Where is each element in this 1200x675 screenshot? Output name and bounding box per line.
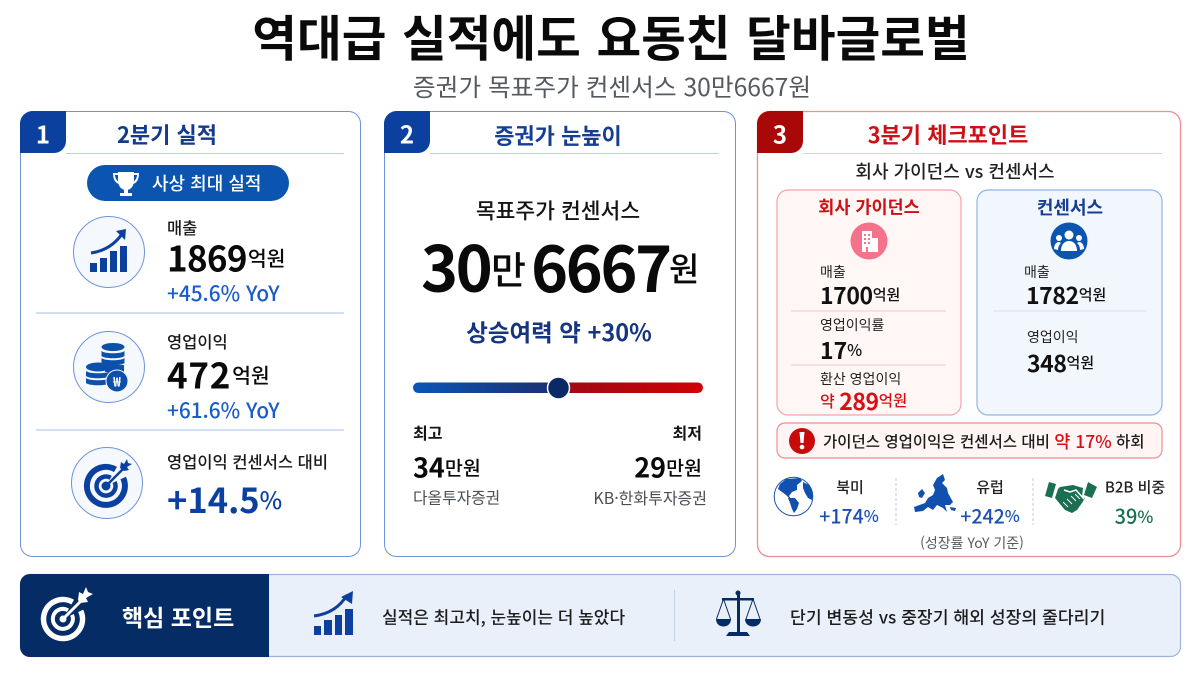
big number: 30만6667원: 원 [669,243,699,291]
badge: 사상 최대 실적: 사상 최대 실적 [152,170,261,196]
card: 회사 가이던스: 17% [820,332,862,366]
subheading: 회사 가이던스 vs 컨센서스 [855,158,1055,184]
panel: 3분기 체크포인트 [757,111,1180,556]
heading: 2분기 실적: 2분기 실적 [117,118,217,150]
low target: 최저 [673,420,702,444]
title: 역대급 실적에도 요동친 달바글로벌 [252,0,970,70]
heading: 증권가 눈높이: 증권가 눈높이 [494,119,622,151]
card: 컨센서스 [977,190,1162,415]
note: (성장률 YoY 기준) [920,533,1024,553]
icon: target [44,587,93,639]
panel: 증권가 눈높이 [384,111,736,556]
metric: 영업이익 컨센서스 대비 [72,448,328,523]
icon: people [1050,222,1088,260]
badge: 사상 최대 실적 [87,165,289,201]
label: 목표주가 컨센서스: 목표주가 컨센서스 [476,194,640,226]
metric: 매출 [74,215,286,307]
low target: 29만원 [634,446,702,486]
high target: 34만원 [413,446,481,486]
high target [413,420,500,508]
badge: 1: 1 [36,116,50,150]
high target: 최고 [413,420,443,444]
icon: alert [789,428,815,454]
card: 회사 가이던스: 회사 가이던스 [818,194,920,220]
icon: coins: ₩ [112,372,121,390]
icon: europe map [914,474,956,512]
big number: 30만6667원: 6667 [531,220,670,310]
icon: trophy [113,172,139,196]
point 1: 실적은 최고치, 눈높이는 더 높았다 [382,604,625,628]
stat: 북미: 북미 [836,476,864,498]
icon: building [850,222,888,260]
icon: scales [716,590,761,636]
panel: 핵심 포인트 [20,574,1180,657]
high target: 다올투자증권 [413,486,500,508]
card: 컨센서스: 348억원 [1027,345,1094,379]
icon: target [72,448,142,518]
metric: 영업이익 [74,329,280,424]
panel: 2분기 실적 [20,111,360,556]
card: 컨센서스: 매출 [1024,262,1050,282]
icon: globe [774,477,813,516]
card: 회사 가이던스: 1700억원 [820,277,900,311]
icon: growth chart [74,216,144,288]
card: 회사 가이던스: 약 289억원 [820,383,907,417]
icon: coins [74,332,144,402]
stat: B2B 비중 [1045,476,1165,530]
low target [593,420,707,509]
metric: 영업이익 컨센서스 대비: 영업이익 컨센서스 대비 [167,449,328,473]
metric: 매출: +45.6% YoY [167,277,280,307]
card: 회사 가이던스 [777,190,961,417]
metric: 매출: 1869억원 [167,232,286,282]
big number: 30만6667원: 만 [491,240,526,294]
badge: 2 [384,111,430,153]
stat: B2B 비중: B2B 비중 [1105,476,1165,498]
big number: 30만6667원: 30 [421,220,490,310]
card: 회사 가이던스: 매출 [820,262,846,282]
stat: 북미: +174% [819,500,879,530]
card: 회사 가이던스: 영업이익률 [820,315,885,335]
metric: 영업이익: +61.6% YoY [167,394,280,424]
icon: growth chart [314,591,353,635]
point 1 [314,591,625,635]
stat: 유럽 [914,474,1020,530]
badge: 2: 2 [400,116,414,150]
card: 컨센서스: 컨센서스 [1037,194,1103,220]
callout: 하회 [777,423,1162,458]
stat: 유럽: +242% [960,500,1020,530]
point 2: 단기 변동성 vs 중장기 해외 성장의 줄다리기 [790,604,1105,628]
badge: 1 [20,111,66,153]
metric: 매출: 매출 [167,215,197,239]
stat: 북미 [774,476,879,530]
point 2 [716,590,1105,636]
badge: 3: 3 [773,116,787,150]
label block: 핵심 포인트: 핵심 포인트 [122,599,234,633]
badge: 3 [757,111,803,153]
card: 컨센서스: 1782억원 [1026,277,1106,311]
callout: 하회: 가이던스 영업이익은 컨센서스 대비 약 17% 하회 [823,428,1145,454]
stat: B2B 비중: 39% [1115,500,1153,530]
card: 회사 가이던스: 환산 영업이익 [820,369,901,389]
metric: 영업이익: 472억원 [167,348,270,400]
heading: 3분기 체크포인트: 3분기 체크포인트 [868,118,1028,150]
icon: handshake [1045,482,1097,513]
range bar [413,377,703,399]
subtitle: 증권가 목표주가 컨센서스 30만6667원 [413,68,811,104]
upside: 상승여력 약 +30% [466,314,652,348]
stat: 유럽: 유럽 [976,476,1004,498]
card: 컨센서스: 영업이익 [1027,327,1079,347]
low target: KB·한화투자증권 [593,485,707,509]
metric: 영업이익: 영업이익 [167,329,228,353]
label block: 핵심 포인트 [20,574,269,657]
metric: 영업이익 컨센서스 대비: +14.5% [167,473,282,523]
